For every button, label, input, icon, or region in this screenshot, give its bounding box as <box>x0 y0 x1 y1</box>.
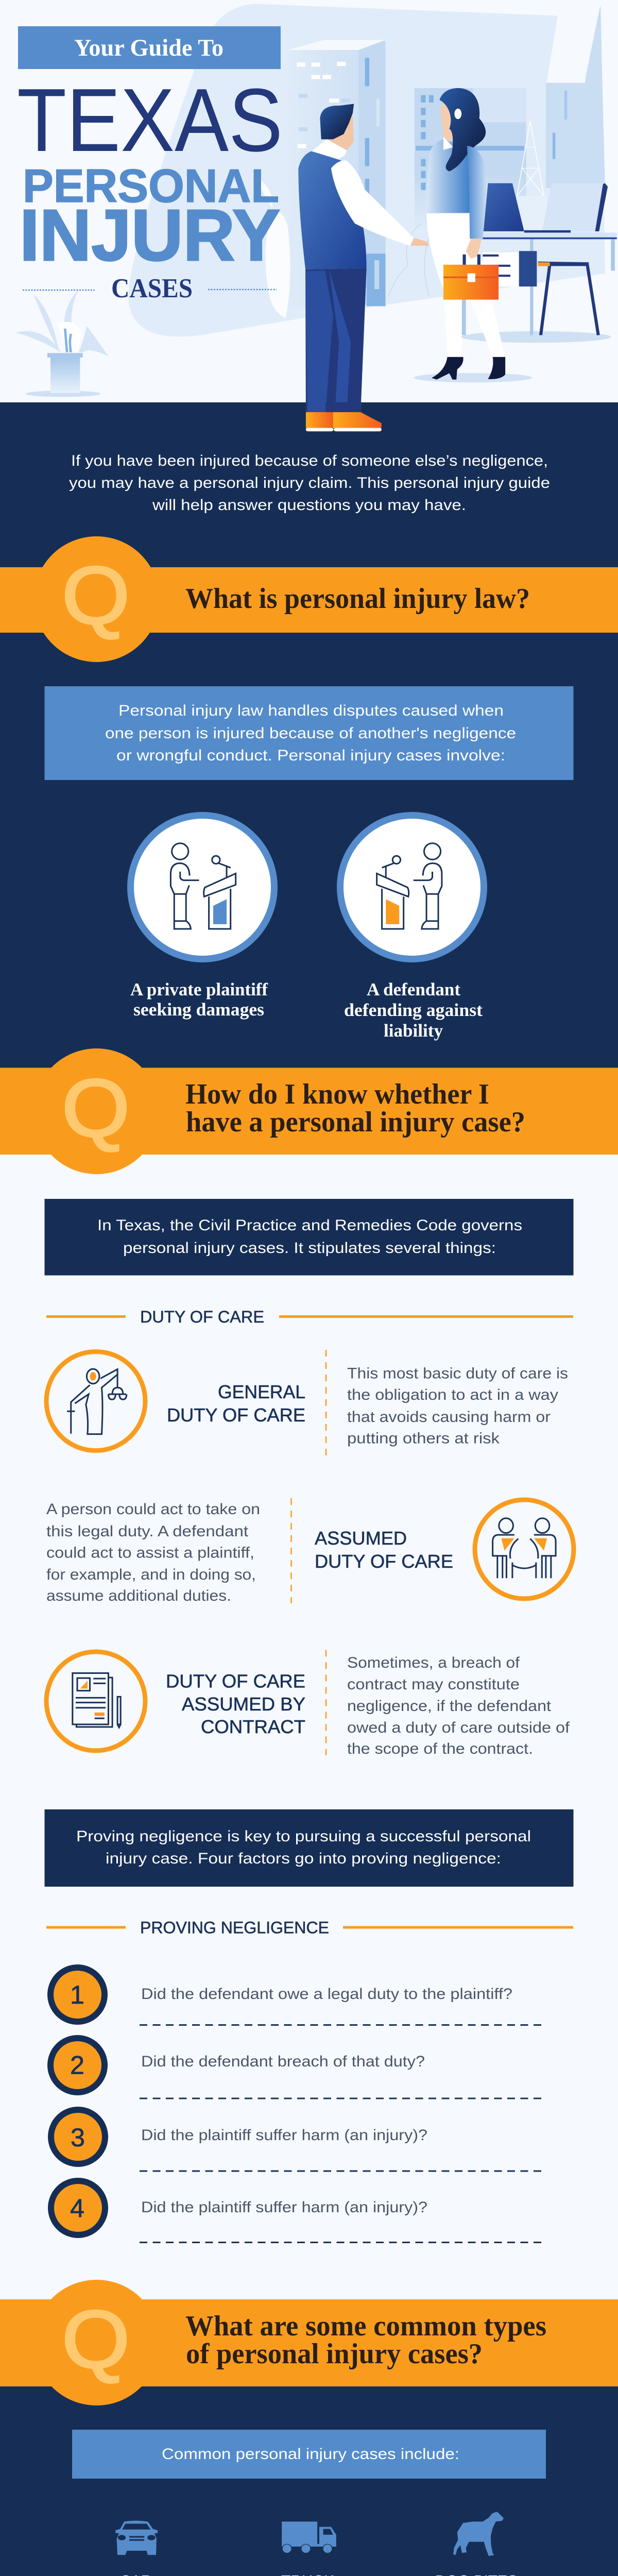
question banner 3: Q <box>62 2294 130 2385</box>
label: ASSUMED BY <box>182 1693 305 1715</box>
description: this legal duty. A defendant <box>46 1523 249 1540</box>
label: DUTY OF CARE <box>166 1670 305 1692</box>
description: putting others at risk <box>347 1430 500 1447</box>
icon: plaintiff at podium <box>131 815 274 959</box>
factor 1: Did the defendant owe a legal duty to the plaintiff? <box>141 1986 512 2003</box>
navy section background: case types <box>0 2386 618 2576</box>
label <box>315 1528 453 1572</box>
title: injury: INJURY <box>20 194 280 276</box>
icon: contract document <box>46 1652 145 1751</box>
question banner 2: Q <box>62 1063 130 1154</box>
description: the scope of the contract. <box>347 1740 533 1757</box>
factor 4 <box>51 2181 542 2242</box>
title: personal: PERSONAL <box>23 160 279 212</box>
duty assumed by contract row <box>46 1650 570 1757</box>
caption: defendant: A defendant <box>367 979 460 999</box>
intro text: will help answer questions you may have. <box>152 497 466 514</box>
blue box: common cases <box>72 2430 546 2479</box>
navy section background: what is personal injury law <box>0 567 618 1155</box>
title banner: your guide to: Your Guide To <box>74 35 224 61</box>
assumed duty of care row <box>46 1498 574 1604</box>
blue info box: personal injury law <box>44 686 574 780</box>
case: truck accidents <box>263 2521 351 2576</box>
factor 2: Did the defendant breach of that duty? <box>141 2053 425 2070</box>
description: owed a duty of care outside of <box>347 1719 570 1736</box>
factor 3: Did the plaintiff suffer harm (an injury)? <box>141 2127 427 2144</box>
description: A person could act to take on <box>46 1501 260 1518</box>
factor 4: Did the plaintiff suffer harm (an injury)? <box>141 2199 427 2216</box>
icon: lady justice <box>46 1352 145 1451</box>
description: contract may constitute <box>347 1676 520 1693</box>
description: Sometimes, a breach of <box>347 1654 520 1671</box>
question banner 3 <box>0 2280 618 2405</box>
factor 4: 4 <box>70 2194 84 2223</box>
label: ASSUMED <box>315 1528 407 1549</box>
navy box: civil practice and remedies code: personal injury cases. It stipulates several things: <box>123 1240 496 1257</box>
caption: defendant: liability <box>384 1021 443 1041</box>
icon: dog <box>453 2512 504 2556</box>
title: texas: TEXAS <box>17 70 283 170</box>
navy box: proving negligence intro: injury case. Four factors go into proving negligence: <box>106 1850 501 1867</box>
factor 3: 3 <box>71 2123 85 2152</box>
blue info box: personal injury law: Personal injury law handles disputes caused when <box>118 702 504 719</box>
question banner 1 <box>0 536 618 662</box>
question banner 1: Q <box>62 550 130 641</box>
label: DUTY OF CARE <box>315 1551 453 1572</box>
navy intro band <box>0 402 618 567</box>
question banner 2: How do I know whether I <box>185 1078 489 1110</box>
section heading: duty of care <box>46 1308 573 1326</box>
section heading: proving negligence: PROVING NEGLIGENCE <box>140 1919 329 1937</box>
navy box: proving negligence intro <box>44 1809 574 1887</box>
description: that avoids causing harm or <box>347 1409 551 1426</box>
navy box: proving negligence intro: Proving negligence is key to pursuing a successful personal <box>76 1828 531 1845</box>
intro text: If you have been injured because of someone else’s negligence, <box>71 452 548 469</box>
blue box: common cases: Common personal injury cases include: <box>162 2446 459 2463</box>
title: cases with dotted rules: CASES <box>111 274 193 303</box>
icon: two people around table <box>475 1500 574 1599</box>
icon: truck <box>282 2521 336 2553</box>
man's trouser cuffs and shoes on navy <box>306 402 382 431</box>
case: dog bites <box>435 2512 518 2576</box>
label <box>167 1381 305 1426</box>
blue info box: personal injury law: one person is injured because of another's negligence <box>105 725 516 742</box>
title banner: your guide to <box>18 26 281 69</box>
label: GENERAL <box>218 1381 305 1402</box>
description <box>347 1365 568 1447</box>
factor 1 <box>50 1968 542 2025</box>
factor 2 <box>50 2038 542 2098</box>
navy box: civil practice and remedies code <box>44 1199 574 1276</box>
description: for example, and in doing so, <box>46 1566 256 1583</box>
factor 2: 2 <box>70 2050 84 2079</box>
caption: private plaintiff: seeking damages <box>133 999 264 1020</box>
description: This most basic duty of care is <box>347 1365 568 1382</box>
factor 1: 1 <box>70 1980 84 2009</box>
icon: car <box>115 2521 158 2555</box>
caption: defendant: defending against <box>344 1000 483 1020</box>
navy box: civil practice and remedies code: In Texas, the Civil Practice and Remedies Code governs <box>97 1217 522 1234</box>
description <box>347 1654 570 1757</box>
question banner 3: of personal injury cases? <box>186 2338 483 2370</box>
label: DUTY OF CARE <box>167 1404 305 1426</box>
question banner 1: What is personal injury law? <box>185 583 530 615</box>
description: could act to assist a plaintiff, <box>46 1545 254 1561</box>
caption: private plaintiff <box>130 979 268 1020</box>
description: assume additional duties. <box>46 1587 231 1604</box>
section heading: duty of care: DUTY OF CARE <box>140 1308 264 1326</box>
icon: defendant at podium <box>340 815 484 959</box>
question banner 3: What are some common types <box>185 2310 546 2342</box>
intro text <box>69 452 550 514</box>
question banner 2 <box>0 1048 618 1174</box>
hero illustration: city office with two people <box>16 4 617 412</box>
general duty of care row <box>46 1350 568 1455</box>
case: car accidents <box>91 2521 179 2576</box>
description <box>46 1501 260 1604</box>
factor 3 <box>51 2110 542 2171</box>
label: CONTRACT <box>201 1716 305 1737</box>
caption: defendant <box>344 979 483 1041</box>
section heading: proving negligence <box>46 1919 573 1937</box>
caption: private plaintiff: A private plaintiff <box>130 979 268 999</box>
blue info box: personal injury law: or wrongful conduct. Personal injury cases involve: <box>116 747 505 764</box>
intro text: you may have a personal injury claim. This personal injury guide <box>69 474 550 492</box>
question banner 2: have a personal injury case? <box>186 1106 525 1138</box>
label <box>166 1670 305 1737</box>
description: the obligation to act in a way <box>347 1386 558 1403</box>
description: negligence, if the defendant <box>347 1698 552 1715</box>
